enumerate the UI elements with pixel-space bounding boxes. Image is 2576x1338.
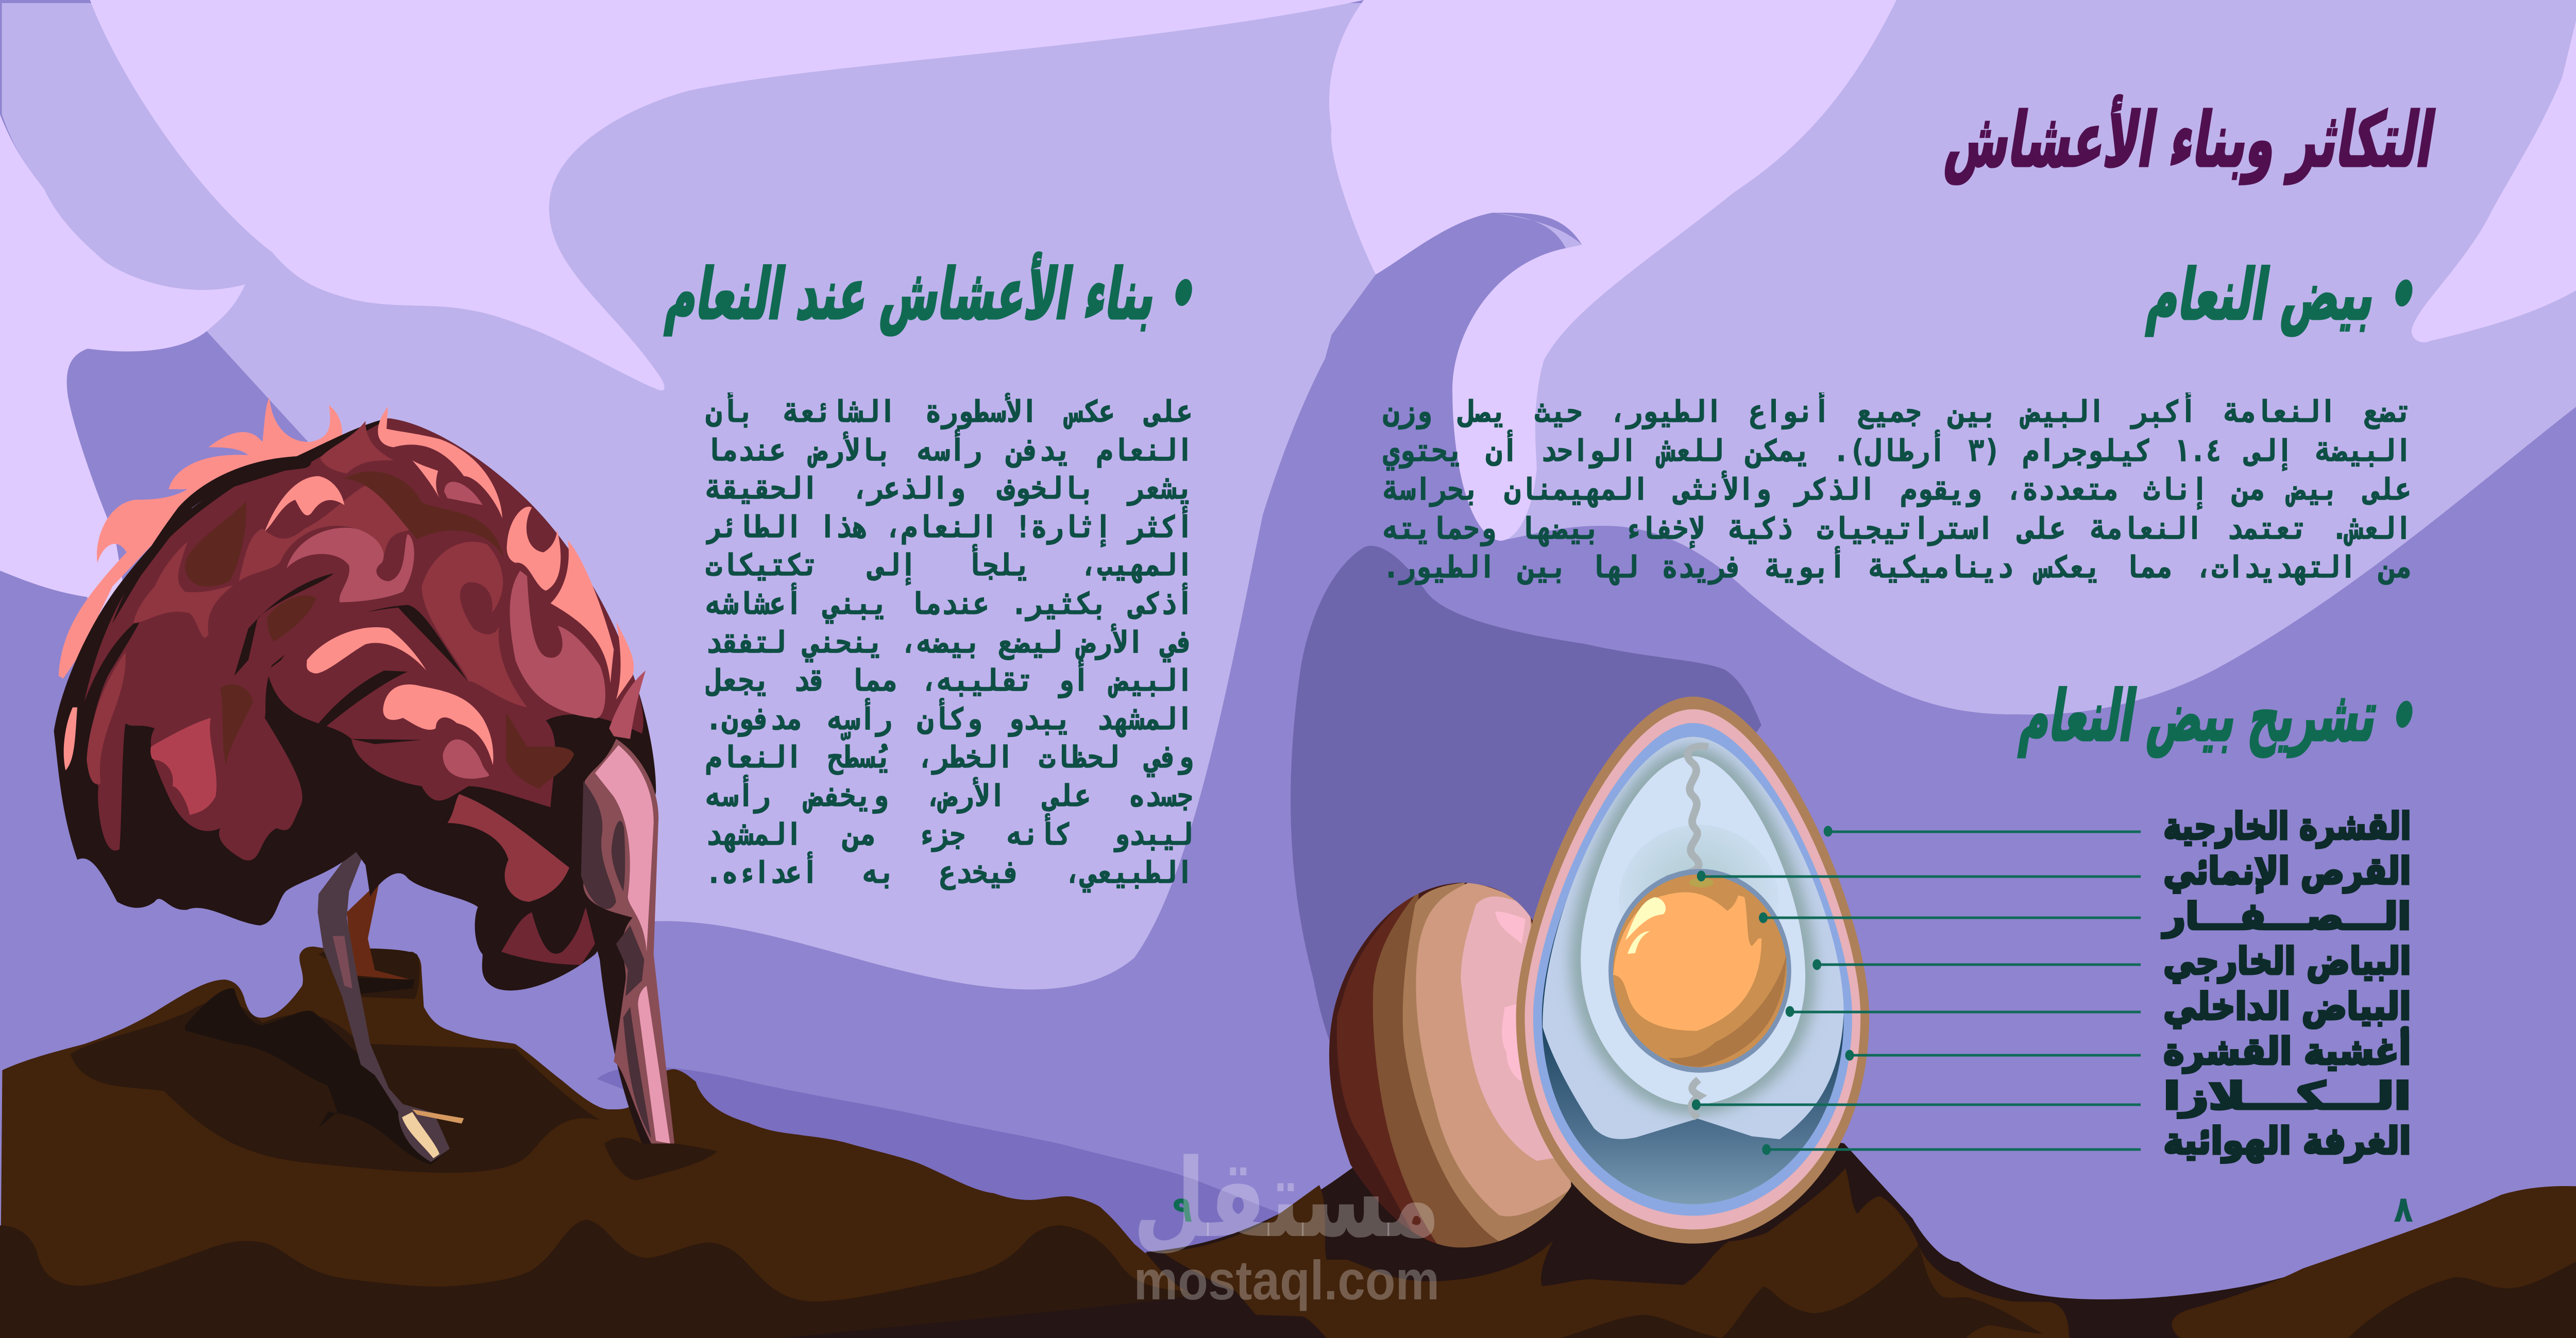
background: light blob right page	[1378, 0, 2576, 714]
background: hook sliver	[1493, 213, 1582, 248]
background: dome under hook	[1240, 213, 1582, 670]
body text: ostrich eggs: البيضة إلى ١.٤ كيلوجرام (٣ أرطال). يمكن للعش الواحد أن يحتوي	[1383, 433, 2412, 468]
body text: nest building: وفي لحظات الخطر، يُسطّح النعام	[706, 740, 1193, 775]
heading: nest building: • بناء الأعشاش عند النعام	[662, 252, 1204, 335]
body text: nest building: النعام يدفن رأسه بالأرض عندما	[706, 433, 1193, 468]
air chamber	[1542, 736, 1844, 1204]
plumage rose patches	[287, 482, 646, 779]
dirt around head	[604, 1138, 717, 1180]
main egg cross-section	[1516, 697, 1869, 1244]
background: pale blob top	[90, 0, 1364, 390]
leader lines	[1693, 827, 2141, 1154]
body text: ostrich eggs	[1383, 392, 2412, 598]
body text: ostrich eggs: تضع النعامة أكبر البيض بين جميع أنواع الطيور، حيث يصل وزن	[1383, 394, 2412, 429]
body text: nest building: البيض أو تقليبه، مما قد يجعل	[706, 663, 1193, 698]
plumage brown patches	[185, 471, 574, 789]
vitelline ring	[1608, 869, 1791, 1073]
ground: right side hills and shadows	[1561, 1186, 2576, 1338]
ground: bottom centre shadow	[643, 1225, 1194, 1338]
inner albumen	[1581, 756, 1805, 1105]
background: light blob left page	[2, 3, 1423, 989]
body text: ostrich eggs: على بيض من إناث متعددة، ويقوم الذكر والأنثى المهيمنان بحراسة	[1383, 472, 2412, 507]
body text: ostrich eggs: من التهديدات، مما يعكس ديناميكية أبوية فريدة لها بين الطيور.	[1383, 550, 2412, 585]
plumage red patches	[87, 421, 569, 902]
body text: nest building: جسده على الأرض، ويخفض رأسه	[706, 778, 1193, 813]
neck	[581, 739, 675, 1146]
egg part labels: الـــصـــفـــار	[2162, 896, 2411, 938]
body text: nest building: المهيب، يلجأ إلى تكتيكات	[706, 547, 1193, 582]
body dark plumage	[54, 418, 656, 990]
watermark: مستقل	[1133, 1136, 1440, 1262]
ground: brown patch centre	[1161, 1168, 2069, 1338]
body text: ostrich eggs: العش. تعتمد النعامة على استراتيجيات ذكية لإخفاء بيضها وحمايته	[1383, 511, 2412, 546]
back leg	[347, 881, 415, 981]
egg part labels: القشرة الخارجية	[2163, 805, 2411, 848]
plumage salmon highlights	[64, 407, 634, 770]
egg part labels: البياض الداخلي	[2163, 986, 2411, 1028]
heading: ostrich eggs: • بيض النعام	[2143, 255, 2424, 336]
background: dark wedge left page	[597, 1067, 1286, 1257]
body text: nest building: على عكس الأسطورة الشائعة بأن	[706, 394, 1193, 429]
plumage black streaks	[112, 456, 422, 749]
body text: nest building: المشهد يبدو وكأن رأسه مدفون.	[706, 701, 1193, 736]
background: pale shape top right	[2412, 21, 2576, 342]
back egg	[1329, 883, 1575, 1251]
ostrich	[54, 397, 717, 1180]
background: pale lobe far left	[0, 114, 245, 670]
body maroon plumage	[84, 418, 643, 861]
glow around yolk	[1619, 825, 1778, 976]
body text: nest building	[706, 392, 1193, 897]
egg part labels: البياض الخارجي	[2163, 940, 2411, 983]
pale feather fringe	[59, 397, 342, 678]
background: dark blob behind egg	[1291, 546, 1761, 1133]
ground: bottom left shadow	[0, 1220, 689, 1338]
front leg	[318, 838, 466, 1162]
albumen glow	[1581, 756, 1805, 1105]
watermark: mostaql.com	[1134, 1249, 1439, 1311]
egg part labels: أغشية القشرة	[2163, 1027, 2411, 1073]
egg part labels: الـــكـــلازا	[2163, 1075, 2411, 1118]
page number 9: ٩	[1173, 1188, 1192, 1230]
background: pale swoosh right page	[1329, 0, 1896, 541]
shell	[1516, 697, 1869, 1244]
body text: nest building: في الأرض ليضع بيضه، ينحني لتفقد	[706, 625, 1193, 660]
outer albumen	[1543, 736, 1844, 1139]
watermark	[1133, 1136, 1440, 1311]
shell membrane pink	[1525, 709, 1860, 1229]
chalaza	[1666, 746, 1708, 879]
yolk	[1613, 874, 1787, 1067]
egg part labels	[2162, 805, 2411, 1163]
egg part labels: القرص الإنمائي	[2163, 850, 2411, 893]
body text: nest building: أذكى بكثير. عندما يبني أعشاشه	[706, 586, 1193, 621]
shell membrane blue	[1533, 723, 1852, 1216]
page number 8: ٨	[2394, 1188, 2413, 1230]
ground: brown hills	[0, 947, 1378, 1338]
germinal disc	[1689, 878, 1714, 887]
body text: nest building: أكثر إثارة! النعام، هذا الطائر	[706, 509, 1193, 544]
belly maroon patch	[501, 907, 595, 965]
body text: nest building: الطبيعي، فيخدع به أعداءه.	[706, 855, 1193, 890]
mound shadows	[70, 1001, 600, 1173]
ground: dark hill under eggs	[783, 1082, 2342, 1338]
body text: nest building: ليبدو كأنه جزء من المشهد	[706, 817, 1193, 852]
body text: nest building: يشعر بالخوف والذعر، الحقيقة	[706, 471, 1193, 506]
plumage crimson patch	[150, 718, 216, 815]
egg part labels: الغرفة الهوائية	[2163, 1120, 2411, 1163]
